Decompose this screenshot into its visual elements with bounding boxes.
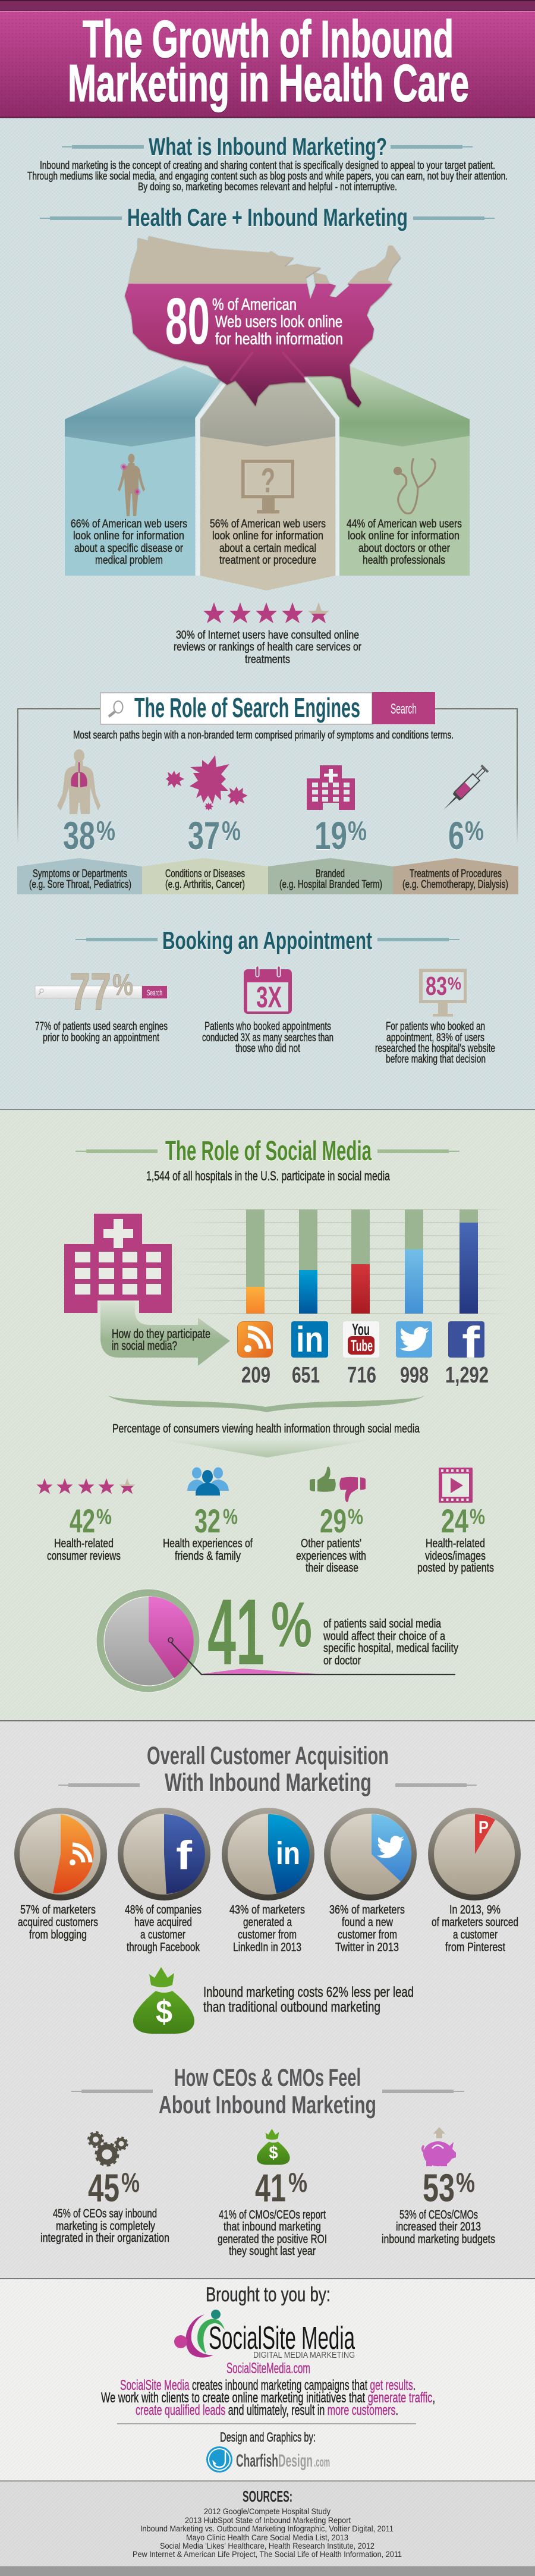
stat: friends and family bbox=[163, 1468, 253, 1563]
pie: linkedin 43%: customer from bbox=[238, 1928, 297, 1942]
stat: consumer reviews bbox=[37, 1478, 136, 1563]
stat: videos and images: posted by patients bbox=[417, 1562, 494, 1575]
pie: pinterest 9%: a customer bbox=[453, 1928, 498, 1942]
panel: disease or medical problem: look online for information bbox=[73, 530, 184, 542]
stats: search percentages: 37 bbox=[188, 813, 220, 857]
panel: doctors or health professionals: about doctors or other bbox=[358, 542, 451, 555]
stat: 83% monitor: appointment, 83% of users bbox=[386, 1032, 484, 1044]
stat: 3X calendar: those who did not bbox=[235, 1042, 301, 1055]
stat: 45% ceos: 45 bbox=[88, 2166, 119, 2210]
stats: search percentages: % bbox=[348, 815, 367, 846]
logo: charfish design: Design bbox=[278, 2451, 313, 2471]
text: socialsite description: SocialSite Media creates inbound marketing campaigns that get results. bbox=[120, 2377, 416, 2393]
icon: money bag large bbox=[133, 1967, 194, 2034]
logo: charfish design: .com bbox=[314, 2455, 330, 2470]
stat: 77% with search bar: prior to booking an appointment bbox=[43, 1032, 160, 1044]
panel: medical treatment or procedure: about a certain medical bbox=[219, 542, 316, 555]
icon: twitter bbox=[396, 1321, 432, 1358]
stats: search percentages: % bbox=[222, 815, 241, 846]
stat: patients experiences: % bbox=[348, 1504, 363, 1529]
icon: linkedin: in bbox=[296, 1320, 323, 1359]
arrow: how do they participate bbox=[100, 1300, 230, 1366]
stat: 3X calendar: 3X bbox=[256, 981, 282, 1014]
sources: Pew Internet & American Life Project, The Social Life of Health Information, 2011 bbox=[133, 2549, 402, 2559]
stat: friends and family: friends & family bbox=[175, 1550, 241, 1563]
pie: facebook 48% bbox=[118, 1808, 210, 1954]
us map with 80% stat: % of American bbox=[212, 295, 297, 313]
panel: medical treatment or procedure: 56% of American web users bbox=[210, 518, 326, 530]
heading: what is inbound marketing: What is Inbound Marketing? bbox=[149, 133, 387, 161]
tab: symptoms or departments bbox=[17, 858, 142, 894]
stat: 83% monitor: % bbox=[448, 974, 461, 994]
stat: 41% patients: % bbox=[271, 1588, 312, 1660]
text: reviews stat: 30% of Internet users have consulted online bbox=[176, 629, 359, 642]
stats: search percentages: 6 bbox=[448, 813, 464, 857]
pie: pinterest 9% bbox=[428, 1808, 521, 1954]
pie: twitter 36%: Twitter in 2013 bbox=[335, 1941, 399, 1954]
tab: branded: (e.g. Hospital Branded Term) bbox=[279, 878, 382, 890]
icon: hospital bbox=[307, 765, 355, 810]
tab: conditions or diseases bbox=[142, 858, 268, 894]
stat: 45% ceos: % bbox=[121, 2167, 140, 2198]
text: design credit: Design and Graphics by: bbox=[220, 2430, 316, 2445]
pie: blogging 57%: acquired customers bbox=[18, 1916, 98, 1929]
panel: doctors or health professionals: 44% of American web users bbox=[347, 518, 462, 530]
stat: 53% budgets bbox=[382, 2127, 495, 2246]
us map with 80% stat: for health information bbox=[215, 329, 343, 348]
star rating bbox=[203, 602, 329, 623]
heading: overall customer acquisition bbox=[58, 1742, 477, 1797]
logo: charfish design: Charfish bbox=[236, 2451, 278, 2471]
stat: 3X calendar bbox=[202, 967, 333, 1055]
panel: disease or medical problem: about a specific disease or bbox=[74, 542, 184, 555]
text: percentage of consumers: Percentage of consumers viewing health information through social media bbox=[112, 1422, 420, 1435]
tab: symptoms or departments: (e.g. Sore Throat, Pediatrics) bbox=[29, 878, 131, 890]
pie: twitter 36%: 36% of marketers bbox=[329, 1903, 405, 1917]
pie chart: 41% bbox=[96, 1589, 455, 1692]
icon: stethoscope bbox=[395, 459, 435, 514]
icon: youtube: Tube bbox=[351, 1337, 373, 1355]
stat: 83% monitor: before making that decision bbox=[386, 1053, 486, 1066]
icon: rss bbox=[238, 1321, 272, 1357]
stat: 77% with search bar: % bbox=[112, 968, 133, 1001]
panel frame: search engines bbox=[18, 709, 517, 844]
text: hospitals count: 1,544 of all hospitals in the U.S. participate in social media bbox=[146, 1168, 391, 1183]
stats: search percentages: 38 bbox=[63, 813, 95, 857]
text: reviews stat: treatments bbox=[245, 654, 290, 666]
pie: linkedin 43% bbox=[222, 1808, 314, 1954]
stat: 83% monitor bbox=[375, 969, 495, 1066]
stat: 41% patients: would affect their choice of a bbox=[323, 1630, 446, 1643]
icon: people bbox=[187, 1468, 229, 1496]
stat: videos and images bbox=[417, 1468, 494, 1575]
text: reviews stat: reviews or rankings of health care services or bbox=[174, 641, 362, 654]
text: definition bbox=[27, 159, 508, 193]
heading: booking an appointment: Booking an Appointment bbox=[162, 926, 372, 954]
stat: 41% patients: or doctor bbox=[323, 1654, 361, 1667]
arrow: how do they participate: How do they participate bbox=[112, 1327, 210, 1341]
pie: pinterest 9%: In 2013, 9% bbox=[449, 1903, 501, 1917]
text: inbound cost: than traditional outbound marketing bbox=[203, 1999, 380, 2015]
stat: 77% with search bar bbox=[35, 962, 168, 1044]
text: reviews stat bbox=[174, 629, 362, 666]
stat: 77% with search bar: Search bbox=[147, 988, 162, 997]
pie: linkedin 43%: 43% of marketers bbox=[229, 1903, 305, 1917]
stat: patients experiences bbox=[296, 1466, 366, 1575]
search bar heading: Search bbox=[391, 701, 417, 717]
text: socialsite description: create qualified leads and ultimately, result in more customers. bbox=[136, 2402, 398, 2418]
icon: youtube: You bbox=[352, 1320, 370, 1339]
pie: twitter 36% bbox=[324, 1808, 417, 1954]
sources: Mayo Clinic Health Care Social Media List, 2013 bbox=[186, 2533, 348, 2542]
header banner and title bbox=[0, 0, 535, 118]
panel: medical treatment or procedure bbox=[198, 378, 338, 590]
stat: 45% ceos: 45% of CEOs say inbound bbox=[53, 2207, 157, 2220]
pie: twitter 36%: customer from bbox=[338, 1928, 397, 1942]
stat: 45% ceos: marketing is completely bbox=[56, 2220, 155, 2233]
pie: twitter 36%: found a new bbox=[342, 1916, 393, 1929]
stat: 77% with search bar: 77% of patients used search engines bbox=[35, 1020, 168, 1033]
icon: money bag small: $ bbox=[269, 2144, 278, 2163]
tab: branded bbox=[268, 858, 393, 894]
down triangle bbox=[165, 1440, 370, 1457]
stat: 41% roi bbox=[218, 2129, 327, 2258]
stat: friends and family: Health experiences of bbox=[163, 1537, 253, 1550]
heading: how ceos and cmos feel: How CEOs & CMOs Feel bbox=[174, 2063, 361, 2091]
stat: 41% roi: generated the positive ROI bbox=[218, 2233, 327, 2246]
stat: patients experiences: their disease bbox=[306, 1562, 358, 1575]
sources bbox=[133, 2487, 402, 2559]
stats: search percentages: % bbox=[96, 815, 115, 846]
sources: Inbound Marketing vs. Outbound Marketing Infographic, Voltier Digital, 2011 bbox=[140, 2524, 394, 2533]
stat: friends and family: % bbox=[223, 1504, 238, 1529]
logo: socialsite media: SocialSite Media bbox=[209, 2320, 355, 2356]
panel: doctors or health professionals: health professionals bbox=[363, 554, 445, 567]
text: inbound cost: Inbound marketing costs 62% less per lead bbox=[203, 1984, 414, 2000]
text: socialsite description bbox=[101, 2377, 435, 2418]
panel: disease or medical problem bbox=[65, 366, 221, 576]
text: definition: By doing so, marketing becomes relevant and helpful - not interruptive. bbox=[138, 181, 397, 193]
icon: piggy bank bbox=[423, 2127, 456, 2166]
hospital illustration bbox=[64, 1214, 172, 1313]
logo: charfish design bbox=[206, 2446, 330, 2473]
social counts: 651 bbox=[292, 1363, 320, 1388]
icon: thumbs bbox=[310, 1466, 366, 1502]
stat: patients experiences: experiences with bbox=[296, 1550, 366, 1563]
stat: 41% roi: 41% of CMOs/CEOs report bbox=[219, 2209, 326, 2222]
stat: 53% budgets: 53% of CEOs/CMOs bbox=[399, 2209, 478, 2222]
pie: linkedin 43%: LinkedIn in 2013 bbox=[233, 1941, 301, 1954]
pie: linkedin 43%: generated a bbox=[243, 1916, 292, 1929]
tab: conditions or diseases: (e.g. Arthritis, Cancer) bbox=[165, 878, 245, 890]
social counts: 998 bbox=[400, 1363, 429, 1388]
stat: 41% patients: specific hospital, medical facility bbox=[323, 1642, 458, 1655]
pie: facebook 48%: a customer bbox=[140, 1928, 185, 1942]
brace bbox=[108, 1396, 424, 1412]
icon: youtube bbox=[343, 1320, 379, 1358]
stat: 45% ceos: integrated in their organization bbox=[40, 2232, 169, 2245]
stats: search percentages: % bbox=[465, 815, 484, 846]
stat: 53% budgets: 53 bbox=[423, 2166, 455, 2210]
logo: socialsite media: DIGITAL MEDIA MARKETING bbox=[253, 2350, 355, 2360]
icon: gears bbox=[89, 2132, 127, 2165]
pie: facebook 48%: through Facebook bbox=[127, 1941, 200, 1954]
stat: 77% with search bar: 77 bbox=[70, 962, 111, 1021]
sources: Social Media 'Likes' Healthcare, Health Research Institute, 2012 bbox=[160, 2541, 374, 2550]
panel: medical treatment or procedure: treatment or procedure bbox=[219, 554, 316, 567]
pie: facebook 48%: f bbox=[176, 1833, 192, 1878]
heading: health care + inbound marketing: Health Care + Inbound Marketing bbox=[127, 203, 408, 231]
logo: socialsite media bbox=[174, 2310, 355, 2360]
tab: branded: Branded bbox=[316, 868, 345, 879]
arrow: how do they participate: in social media? bbox=[112, 1339, 177, 1353]
icon: monitor with question mark: ? bbox=[261, 461, 275, 500]
stat: videos and images: videos/images bbox=[425, 1550, 486, 1563]
icon: facebook: f bbox=[462, 1318, 480, 1367]
stat: 45% ceos bbox=[40, 2132, 169, 2245]
heading: brought to you by: Brought to you by: bbox=[206, 2283, 331, 2306]
bar chart: social participation bbox=[174, 1210, 512, 1314]
icon: money bag small bbox=[257, 2129, 290, 2165]
stat: videos and images: 24 bbox=[441, 1502, 468, 1540]
stat: videos and images: % bbox=[470, 1504, 485, 1529]
icon: film strip bbox=[439, 1468, 473, 1503]
stat: 53% budgets: increased their 2013 bbox=[396, 2220, 481, 2233]
text: inbound cost bbox=[203, 1984, 414, 2015]
stat: 83% monitor: 83 bbox=[426, 972, 447, 1001]
stat: 83% monitor: For patients who booked an bbox=[386, 1020, 485, 1033]
social counts: 209 bbox=[241, 1363, 270, 1388]
pie: blogging 57%: from blogging bbox=[29, 1928, 87, 1942]
icon: facebook bbox=[448, 1318, 484, 1367]
stat: patients experiences: 29 bbox=[320, 1502, 347, 1540]
pie: pinterest 9%: P bbox=[479, 1818, 489, 1837]
stat: friends and family: 32 bbox=[194, 1502, 221, 1540]
tab: symptoms or departments: Symptoms or Departments bbox=[33, 868, 127, 879]
stats: search percentages bbox=[63, 813, 484, 857]
sources: 2013 HubSpot State of Inbound Marketing Report bbox=[185, 2515, 351, 2525]
social counts bbox=[241, 1363, 489, 1388]
pie: facebook 48%: have acquired bbox=[134, 1916, 192, 1929]
text: socialsite url: SocialSiteMedia.com bbox=[226, 2360, 310, 2377]
sources: 2012 Google/Compete Hospital Study bbox=[204, 2506, 331, 2516]
stat: 53% budgets: % bbox=[456, 2167, 475, 2198]
stat: 3X calendar: Patients who booked appointments bbox=[204, 1020, 331, 1033]
icon: monitor with question mark bbox=[241, 460, 294, 514]
icon: stars bbox=[37, 1478, 136, 1494]
icon: torso with lungs bbox=[57, 749, 100, 814]
tab: conditions or diseases: Conditions or Diseases bbox=[165, 868, 245, 879]
panel: doctors or health professionals bbox=[304, 366, 470, 576]
heading: how ceos and cmos feel bbox=[71, 2063, 464, 2119]
icon: human body bbox=[118, 454, 145, 516]
stat: 41% roi: 41 bbox=[255, 2166, 286, 2210]
pie: blogging 57%: 57% of marketers bbox=[20, 1903, 96, 1917]
stat: 3X calendar: conducted 3X as many searches than bbox=[202, 1032, 333, 1044]
stat: 41% roi: % bbox=[288, 2167, 307, 2198]
stat: 41% roi: they sought last year bbox=[229, 2245, 316, 2258]
stats: search percentages: 19 bbox=[314, 813, 347, 857]
panel: disease or medical problem: 66% of American web users bbox=[71, 518, 187, 530]
us map with 80% stat: Web users look online bbox=[215, 312, 342, 331]
pie: blogging 57% bbox=[14, 1808, 107, 1942]
us map with 80% stat bbox=[125, 236, 401, 407]
stat: videos and images: Health-related bbox=[426, 1537, 485, 1550]
search bar heading: The Role of Search Engines bbox=[134, 692, 360, 723]
icon: magnifier bbox=[109, 701, 122, 717]
social counts: 716 bbox=[347, 1363, 376, 1388]
pie: facebook 48%: 48% of companies bbox=[125, 1903, 202, 1917]
heading: role of social media: The Role of Social Media bbox=[165, 1135, 372, 1166]
pie: pinterest 9%: from Pinterest bbox=[445, 1941, 505, 1954]
panel: disease or medical problem: medical problem bbox=[95, 554, 163, 567]
stat: 41% patients: 41 bbox=[207, 1580, 265, 1685]
heading: overall customer acquisition: Overall Customer Acquisition bbox=[147, 1742, 389, 1770]
icon: syringe bbox=[440, 765, 489, 813]
pie: linkedin 43%: in bbox=[276, 1836, 300, 1871]
panel: medical treatment or procedure: look online for information bbox=[212, 530, 323, 542]
icon: money bag large: $ bbox=[156, 1994, 172, 2030]
stat: consumer reviews: % bbox=[96, 1504, 112, 1529]
icon: virus bbox=[166, 755, 248, 811]
heading: overall customer acquisition: With Inbound Marketing bbox=[165, 1768, 372, 1797]
stat: consumer reviews: Health-related bbox=[54, 1537, 114, 1550]
stat: 41% roi: that inbound marketing bbox=[224, 2220, 321, 2233]
tab: treatments: Treatments of Procedures bbox=[410, 868, 502, 879]
stat: consumer reviews: 42 bbox=[70, 1502, 95, 1540]
stat: patients experiences: Other patients' bbox=[301, 1537, 361, 1550]
stat: consumer reviews: consumer reviews bbox=[47, 1550, 121, 1563]
panel: doctors or health professionals: look online for information bbox=[348, 530, 460, 542]
stat: 41% patients: of patients said social media bbox=[323, 1617, 442, 1631]
text: socialsite description: We work with clients to create online marketing initiatives that generate traffic, bbox=[101, 2390, 435, 2406]
stat: 41% patients bbox=[207, 1580, 458, 1685]
sources: SOURCES: bbox=[243, 2487, 292, 2505]
stat: 53% budgets: inbound marketing budgets bbox=[382, 2233, 495, 2246]
social counts: 1,292 bbox=[445, 1363, 489, 1388]
tab: treatments bbox=[393, 858, 518, 894]
heading: how ceos and cmos feel: About Inbound Marketing bbox=[159, 2091, 376, 2119]
us map with 80% stat: 80 bbox=[165, 285, 210, 358]
